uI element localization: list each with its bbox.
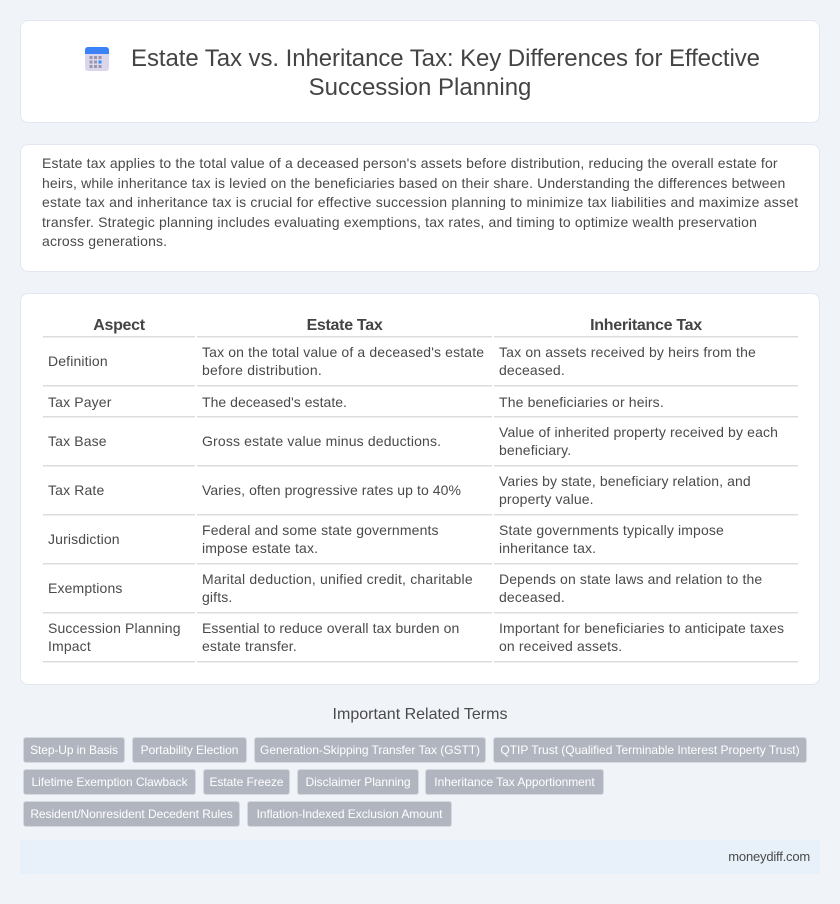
row: exemptions: [48, 571, 762, 605]
row: tax rate: property value.: [499, 491, 594, 507]
row: tax payer: [48, 394, 664, 410]
row: definition: Definition: [48, 353, 108, 369]
heading: important related terms: Important Related Terms: [333, 706, 507, 723]
row: tax base: Value of inherited property received by each: [499, 424, 778, 440]
row: succession planning impact: Important for beneficiaries to anticipate taxes: [499, 620, 784, 636]
related term tags: QTIP Trust (Qualified Terminable Interest Property Trust): [500, 743, 800, 757]
row: definition: Tax on assets received by heirs from the: [499, 344, 756, 360]
row: tax rate: Tax Rate: [48, 482, 104, 498]
row: tax rate: Varies by state, beneficiary relation, and: [499, 473, 751, 489]
related term tags: Portability Election: [141, 743, 238, 757]
row: jurisdiction: Federal and some state governments: [202, 522, 439, 538]
row: succession planning impact: Essential to reduce overall tax burden on: [202, 620, 459, 636]
related term tags: Step-Up in Basis: [30, 743, 118, 757]
row: succession planning impact: Succession Planning: [48, 620, 181, 636]
row: tax payer: The deceased's estate.: [202, 394, 347, 410]
footer: site name: moneydiff.com: [728, 849, 810, 864]
row: tax payer: The beneficiaries or heirs.: [499, 394, 664, 410]
panel: header: [20, 20, 820, 123]
text block: introduction: heirs, while inheritance tax is levied on the beneficiaries based on their share. Understanding the differences between: [42, 174, 785, 190]
related term tags: Inheritance Tax Apportionment: [434, 775, 595, 789]
row: tax rate: Varies, often progressive rates up to 40%: [202, 482, 461, 498]
row: definition: deceased.: [499, 362, 565, 378]
table heading row: Estate Tax: [307, 317, 382, 334]
table heading row: Aspect: [93, 317, 145, 334]
row: definition: before distribution.: [202, 362, 322, 378]
text block: introduction: estate tax and inheritance tax is crucial for effective succession planning to minimize tax liabilities and maximize asset: [42, 194, 798, 210]
row: exemptions: Marital deduction, unified credit, charitable: [202, 571, 473, 587]
row: jurisdiction: impose estate tax.: [202, 540, 318, 556]
row: succession planning impact: Impact: [48, 638, 91, 654]
row: tax base: beneficiary.: [499, 442, 571, 458]
row: exemptions: deceased.: [499, 589, 565, 605]
row: tax rate: [48, 473, 751, 507]
panel: introduction: [20, 144, 820, 272]
related term tags: Inflation-Indexed Exclusion Amount: [257, 807, 442, 821]
related term tags: Generation-Skipping Transfer Tax (GSTT): [260, 743, 480, 757]
text block: introduction: Estate tax applies to the total value of a deceased person's assets before distribution, reducing the overall estate for: [42, 155, 778, 171]
related term tags: Resident/Nonresident Decedent Rules: [30, 807, 233, 821]
text block: introduction: transfer. Strategic planning includes evaluating exemptions, tax rates, and timing to optimize wealth preservation: [42, 214, 757, 230]
related term tags: Lifetime Exemption Clawback: [31, 775, 188, 789]
footer: [20, 840, 820, 874]
row: succession planning impact: estate transfer.: [202, 638, 297, 654]
title: [131, 45, 760, 101]
row: exemptions: Exemptions: [48, 580, 123, 596]
related term tags: [23, 737, 807, 827]
title: Succession Planning: [309, 74, 531, 101]
related term tags: Disclaimer Planning: [305, 775, 411, 789]
table heading row: Inheritance Tax: [590, 317, 702, 334]
row: definition: Tax on the total value of a deceased's estate: [202, 344, 484, 360]
table heading row: [93, 317, 702, 334]
row: jurisdiction: State governments typically impose: [499, 522, 724, 538]
row: jurisdiction: Jurisdiction: [48, 531, 120, 547]
row: tax base: Tax Base: [48, 433, 107, 449]
row: jurisdiction: inheritance tax.: [499, 540, 596, 556]
row: tax base: Gross estate value minus deductions.: [202, 433, 441, 449]
row: tax payer: Tax Payer: [48, 394, 112, 410]
text block: introduction: [42, 155, 798, 249]
title: Estate Tax vs. Inheritance Tax: Key Differences for Effective: [131, 45, 760, 72]
row: tax base: [48, 424, 778, 458]
row: succession planning impact: [48, 620, 784, 654]
row: jurisdiction: [48, 522, 724, 556]
row: exemptions: gifts.: [202, 589, 232, 605]
row: succession planning impact: on received assets.: [499, 638, 622, 654]
related term tags: Estate Freeze: [209, 775, 284, 789]
panel: comparison table: [20, 293, 820, 685]
icon: calendar: [85, 47, 109, 71]
text block: introduction: across generations.: [42, 233, 167, 249]
row: exemptions: Depends on state laws and relation to the: [499, 571, 762, 587]
row: definition: [48, 344, 756, 378]
